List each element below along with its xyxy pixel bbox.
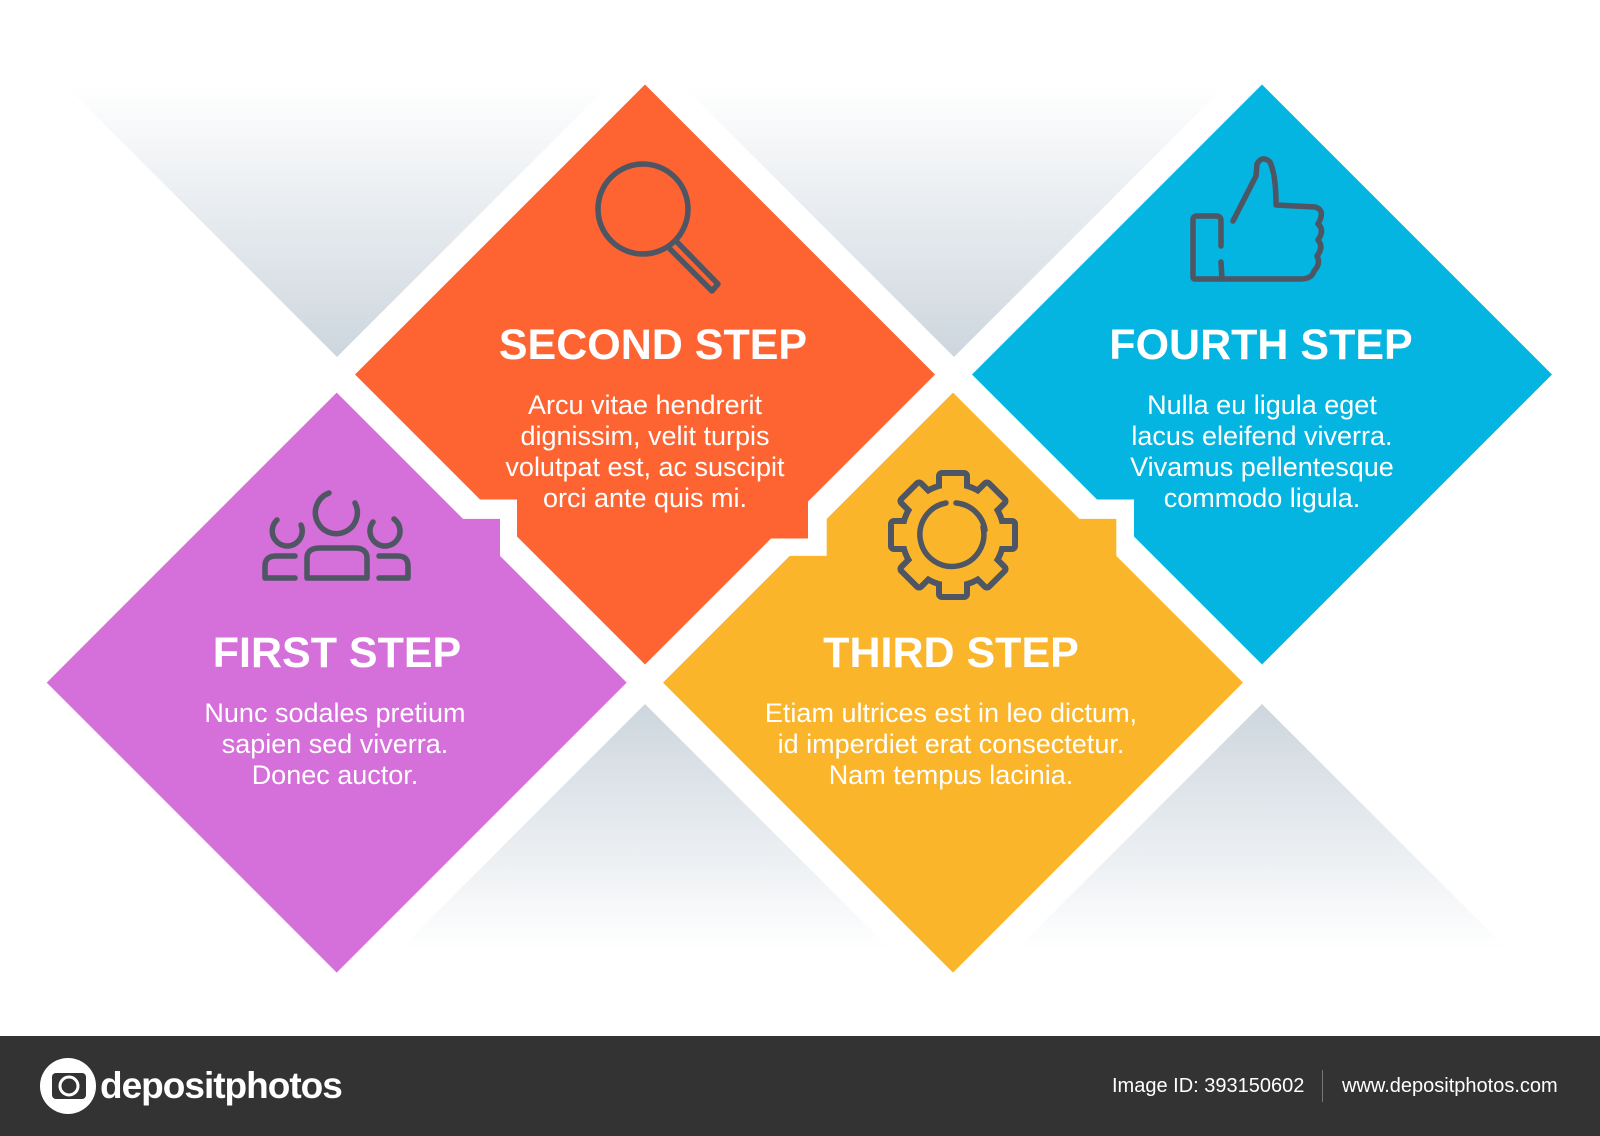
text block: lacus eleifend viverra.: [1131, 421, 1393, 451]
icon: people: [265, 493, 408, 578]
text block: Nunc sodales pretium: [204, 698, 466, 728]
heading: SECOND STEP: [499, 321, 807, 369]
panel: first step: [47, 393, 627, 973]
text block: id imperdiet erat consectetur.: [778, 729, 1124, 759]
text block: Nulla eu ligula eget: [1147, 390, 1377, 420]
image id: Image ID: 393150602: [1112, 1075, 1304, 1097]
text block: orci ante quis mi.: [543, 483, 747, 513]
text block: dignissim, velit turpis: [520, 421, 770, 451]
text block: volutpat est, ac suscipit: [505, 452, 785, 482]
text block: Etiam ultrices est in leo dictum,: [765, 698, 1137, 728]
heading: FOURTH STEP: [1109, 321, 1413, 369]
text block: Nam tempus lacinia.: [829, 760, 1073, 790]
icon: magnifier: [598, 164, 718, 291]
text block: sapien sed viverra.: [222, 729, 448, 759]
text block: Arcu vitae hendrerit: [528, 390, 763, 420]
panel: third step: [663, 393, 1243, 973]
text block: Donec auctor.: [252, 760, 418, 790]
logo text: depositphotos: [100, 1065, 342, 1106]
website: www.depositphotos.com: [1341, 1075, 1558, 1097]
text block: commodo ligula.: [1164, 483, 1360, 513]
text block: Vivamus pellentesque: [1130, 452, 1394, 482]
footer bar: [0, 1036, 1600, 1136]
icon: camera logo: [40, 1058, 96, 1114]
heading: THIRD STEP: [823, 629, 1079, 677]
panel: fourth step: [972, 84, 1552, 664]
icon: gear: [894, 476, 1012, 594]
panel: second step: [355, 84, 935, 664]
heading: FIRST STEP: [213, 629, 461, 677]
icon: thumbs up: [1193, 159, 1322, 279]
